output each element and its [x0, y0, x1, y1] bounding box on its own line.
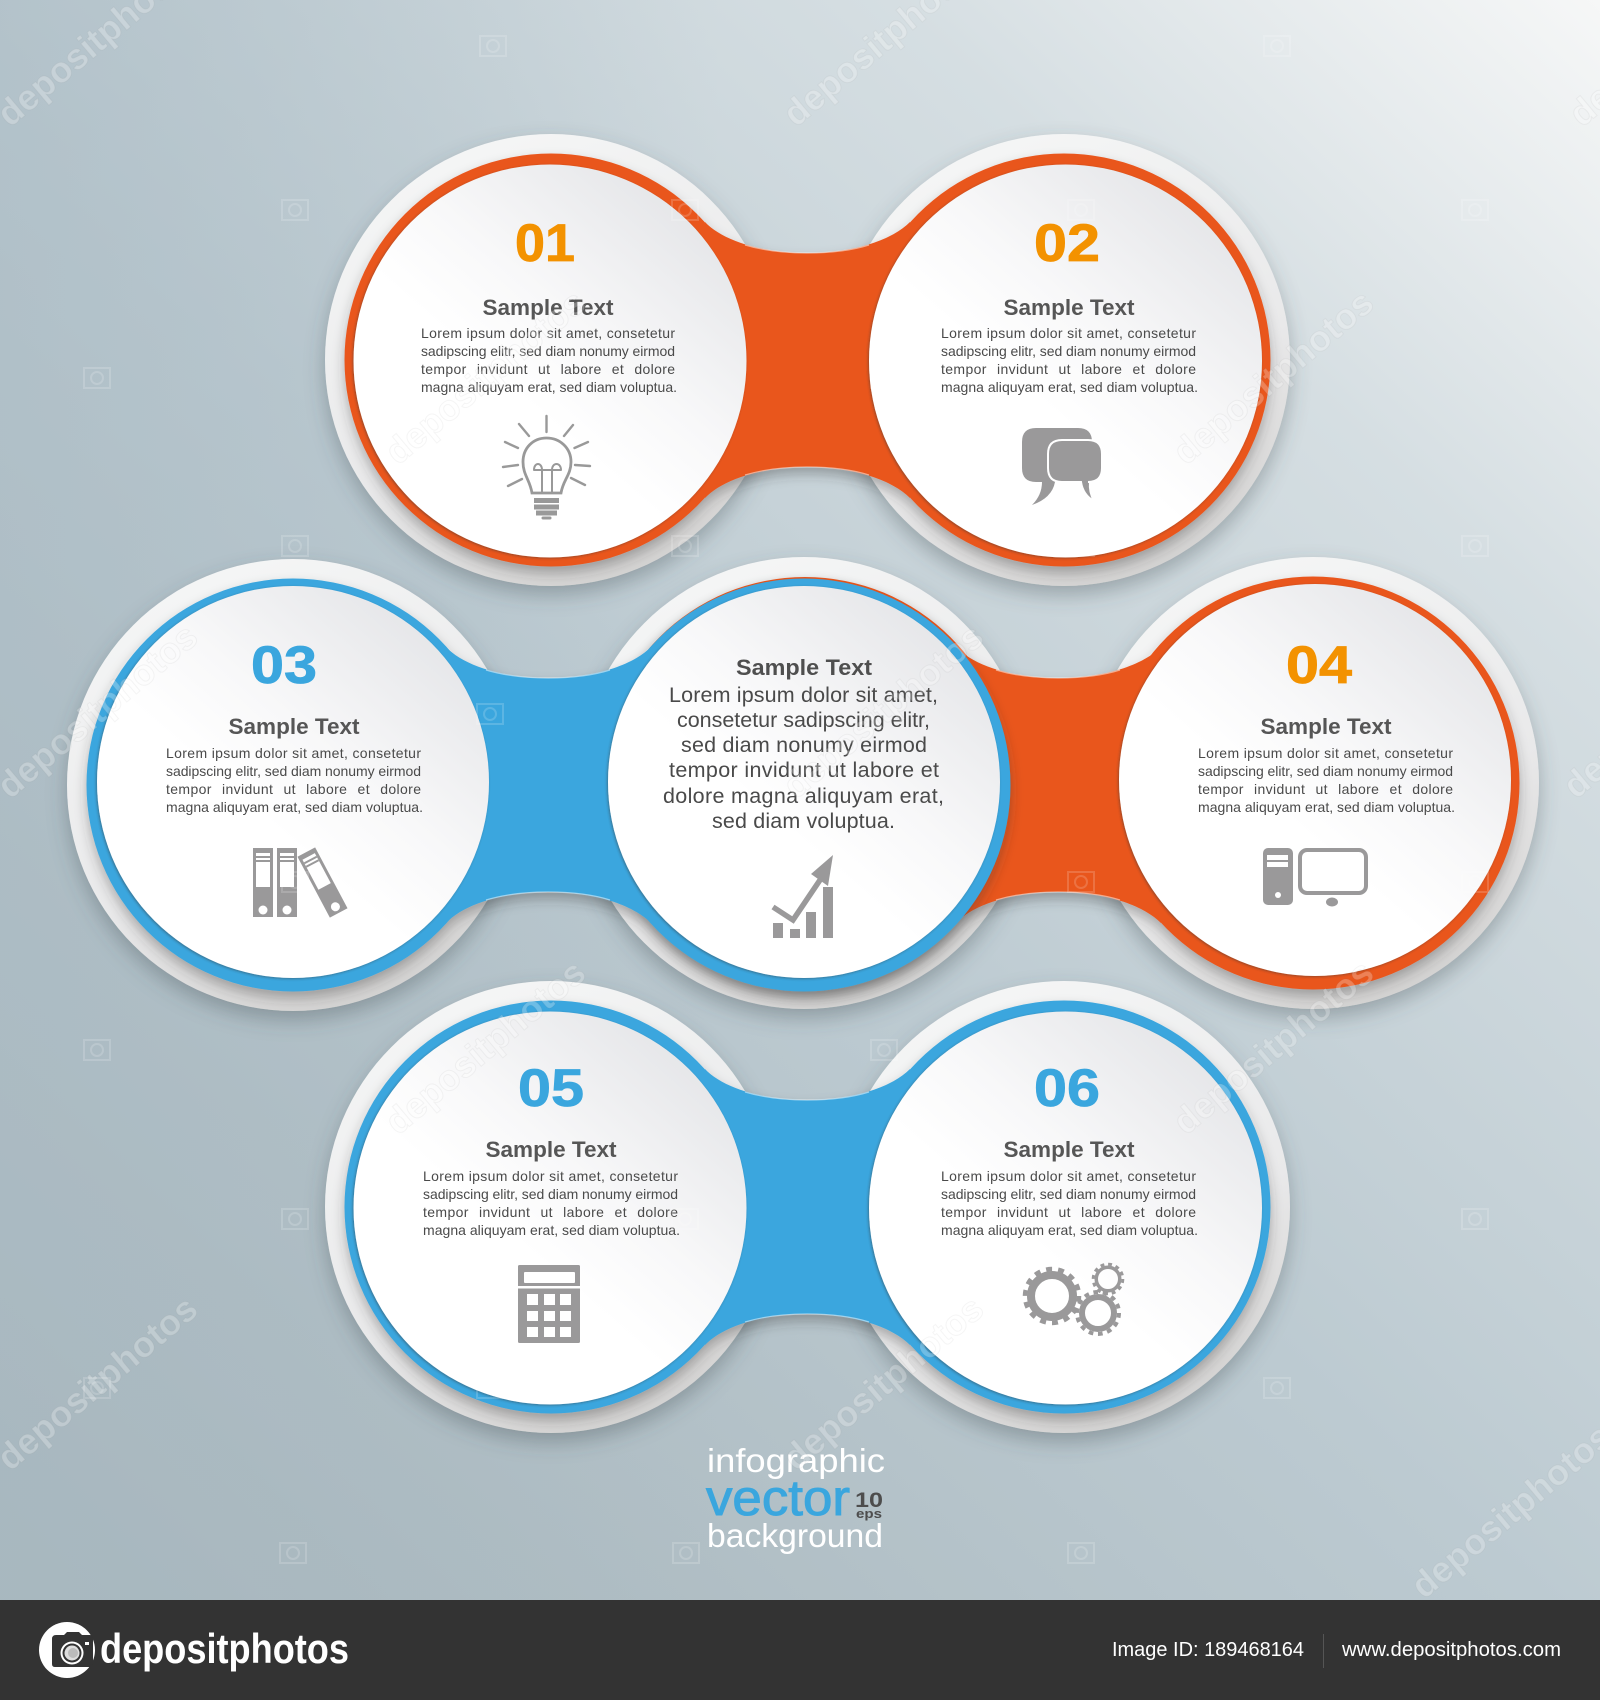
icon: growth chart [773, 855, 833, 938]
text block 03 [166, 636, 423, 815]
text block 04: Sample Text [1260, 714, 1392, 739]
text block 03: Lorem ipsum dolor sit amet, consetetur [166, 745, 421, 761]
blue band with connector [86, 578, 1010, 992]
text block 02: magna aliquyam erat, sed diam voluptua. [941, 379, 1198, 395]
text block 01: tempor invidunt ut labore et dolore [421, 361, 675, 377]
white disc 03 [97, 586, 489, 978]
text block 03: 03 [251, 636, 317, 695]
brand text: infographic vector background: background [707, 1517, 883, 1554]
watermark overlay: depositphotos [377, 951, 593, 1142]
watermark overlay: depositphotos [377, 281, 593, 472]
orange band with connector [344, 154, 1270, 566]
text block 03: sadipscing elitr, sed diam nonumy eirmod [166, 763, 421, 779]
orange band with connector [599, 576, 1520, 990]
text block 01: magna aliquyam erat, sed diam voluptua. [421, 379, 677, 395]
image id: Image ID: 189468164 [1112, 1639, 1304, 1661]
text block 04: Lorem ipsum dolor sit amet, consetetur [1198, 745, 1453, 761]
text block 04: 04 [1286, 636, 1353, 695]
icon: depositphotos logo [39, 1622, 95, 1678]
text block centre: consetetur sadipscing elitr, [677, 708, 930, 732]
icon: speech bubbles [1022, 428, 1102, 505]
icon: binders [253, 847, 348, 918]
outer discs 01 and 02 [325, 134, 1290, 586]
text block 01: Sample Text [482, 295, 614, 320]
watermark overlay: depositphotos [775, 615, 991, 806]
text block 05 [423, 1059, 680, 1238]
text block 02: Lorem ipsum dolor sit amet, consetetur [941, 325, 1196, 341]
brand text: infographic vector background: infographic [707, 1442, 885, 1479]
text block 03: Sample Text [228, 714, 360, 739]
text block 03: tempor invidunt ut labore et dolore [166, 781, 421, 797]
white disc 06 [869, 1012, 1262, 1404]
blue band with connector [344, 1000, 1270, 1414]
website url: www.depositphotos.com [1341, 1639, 1561, 1661]
watermark overlay: depositphotos [1165, 281, 1381, 472]
text block centre: sed diam voluptua. [712, 809, 895, 833]
text block 02: sadipscing elitr, sed diam nonumy eirmod [941, 343, 1196, 359]
text block 06: sadipscing elitr, sed diam nonumy eirmod [941, 1186, 1196, 1202]
text block 04 [1198, 636, 1455, 815]
connector edge highlights [486, 670, 1120, 900]
brand text: infographic vector background [706, 1442, 885, 1554]
white disc centre [608, 586, 1000, 978]
text block 03: magna aliquyam erat, sed diam voluptua. [166, 799, 423, 815]
text block centre: Lorem ipsum dolor sit amet, [669, 683, 938, 707]
text block 04: magna aliquyam erat, sed diam voluptua. [1198, 799, 1455, 815]
connector edge highlight [745, 1092, 869, 1322]
text block 01: 01 [515, 214, 575, 273]
brand text: infographic vector background: vector [706, 1470, 850, 1526]
icon: light bulb [503, 416, 590, 518]
white disc 02 [869, 164, 1262, 558]
text block 06: magna aliquyam erat, sed diam voluptua. [941, 1222, 1198, 1238]
text block centre: Sample Text [736, 655, 873, 680]
text block 05: tempor invidunt ut labore et dolore [423, 1204, 678, 1220]
text block 02 [941, 214, 1198, 395]
connector edge highlight [745, 245, 869, 475]
icon: desktop computer [1263, 848, 1366, 906]
footer brand name: depositphotos [100, 1625, 349, 1672]
icon: gears [1025, 1264, 1123, 1334]
outer discs 05 and 06 [325, 981, 1290, 1433]
text block centre: dolore magna aliquyam erat, [663, 784, 944, 808]
text block 06: Lorem ipsum dolor sit amet, consetetur [941, 1168, 1196, 1184]
text block 01: Lorem ipsum dolor sit amet, consetetur [421, 325, 675, 341]
icon: calculator [518, 1265, 580, 1343]
text block 06: Sample Text [1004, 1137, 1135, 1162]
white disc 05 [354, 1012, 746, 1404]
text block 06: tempor invidunt ut labore et dolore [941, 1204, 1196, 1220]
outer discs row 2 [67, 557, 1539, 1011]
row 2 group: circles 03, centre and 04 [67, 557, 1539, 1011]
text block 02: Sample Text [1004, 295, 1135, 320]
row 1 group: circles 01 and 02 [325, 134, 1290, 586]
text block 06 [941, 1059, 1198, 1238]
text block 02: 02 [1034, 214, 1100, 273]
white disc 04 [1119, 584, 1511, 976]
footer bar [0, 1600, 1600, 1700]
text block 05: 05 [518, 1059, 584, 1118]
watermark overlay: depositphotos [1165, 951, 1381, 1142]
text block 06: 06 [1034, 1059, 1100, 1118]
text block 01 [421, 214, 677, 395]
row 3 group: circles 05 and 06 [325, 981, 1290, 1433]
text block 02: tempor invidunt ut labore et dolore [941, 361, 1196, 377]
text block centre: tempor invidunt ut labore et [669, 758, 939, 782]
text block 04: tempor invidunt ut labore et dolore [1198, 781, 1453, 797]
text block centre: sed diam nonumy eirmod [681, 733, 927, 757]
text block 05: Lorem ipsum dolor sit amet, consetetur [423, 1168, 678, 1184]
text block 05: sadipscing elitr, sed diam nonumy eirmod [423, 1186, 678, 1202]
text block 04: sadipscing elitr, sed diam nonumy eirmod [1198, 763, 1453, 779]
text block 01: sadipscing elitr, sed diam nonumy eirmod [421, 343, 675, 359]
text block 05: magna aliquyam erat, sed diam voluptua. [423, 1222, 680, 1238]
brand text: infographic vector background: 10 [855, 1489, 883, 1512]
text block centre [663, 655, 944, 833]
white disc 01 [354, 164, 746, 558]
text block 05: Sample Text [486, 1137, 617, 1162]
brand text: infographic vector background: eps [856, 1506, 882, 1521]
watermark overlay: depositphotos [775, 1287, 991, 1478]
